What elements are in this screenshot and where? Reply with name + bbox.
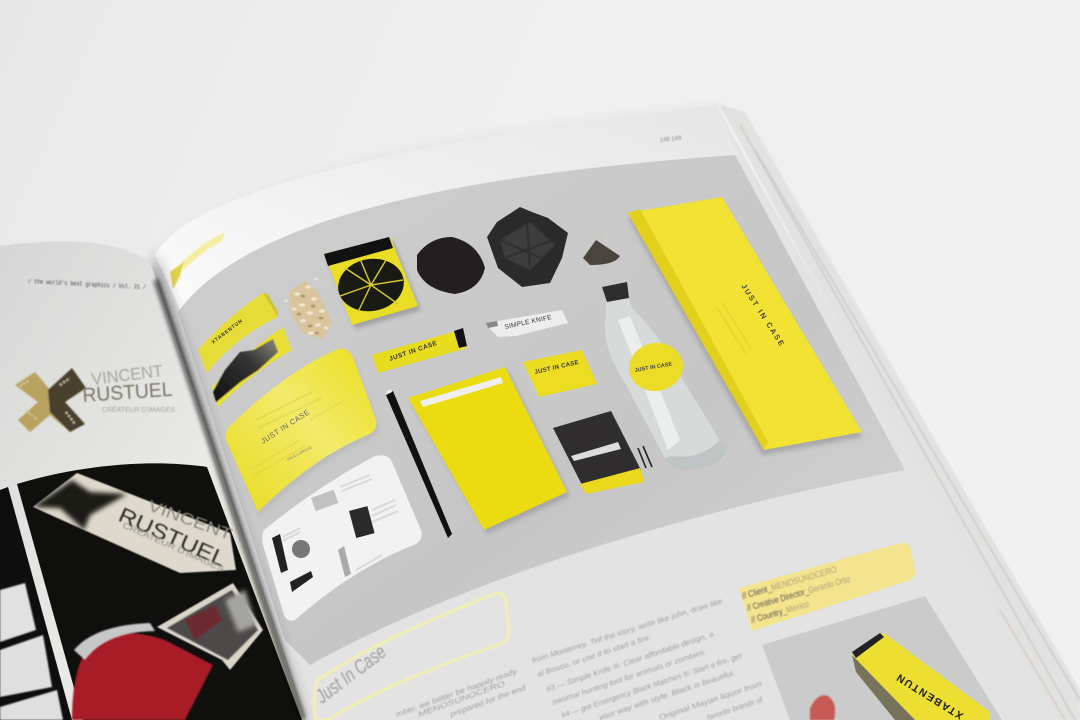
page number: 148 149 [660, 136, 682, 144]
yellow section tab [170, 232, 225, 289]
simple knife tag [486, 310, 568, 337]
credits box: // Country_Mexico [750, 599, 810, 625]
red knife small photo [810, 695, 835, 720]
yellow round-cornered card [226, 349, 378, 516]
credits box: // Client_MENOSUNOCERO [741, 564, 838, 601]
body copy [395, 596, 765, 720]
logo wordmark [82, 361, 175, 414]
credits box [739, 543, 915, 631]
left black strip with tiles [0, 487, 72, 720]
simple knife tag: SIMPLE KNIFE [504, 314, 553, 331]
body copy: #3 — Simple Knife ®: Clear affordable design, a [545, 630, 715, 694]
photo inset [157, 583, 263, 670]
grey photo panel [178, 155, 905, 665]
logo wordmark: CRÉATEUR D'IMAGES [102, 405, 175, 414]
business card: JUST IN CASE [534, 360, 579, 376]
yellow folder [408, 367, 570, 534]
brochure card [262, 455, 422, 621]
business card [523, 350, 597, 397]
main black photo: CRÉATEUR D'IMAGES [121, 521, 225, 574]
white header band [155, 105, 738, 310]
matches [638, 446, 652, 468]
yellow notebook with wheel [324, 237, 421, 329]
credits box: // Creative Director_Gerardo Ortiz [746, 574, 852, 613]
Just In Case heading box [311, 593, 509, 720]
black stones [417, 207, 620, 294]
black pen [386, 389, 452, 538]
just in case matchbook label [372, 328, 467, 373]
yellow round-cornered card: JUST IN CASE [259, 408, 311, 446]
xtabentun labels: XTABENTUN [211, 318, 244, 346]
right page [150, 105, 1058, 720]
body copy: from Monterrey. Tell the story, write like john, draw like [531, 596, 723, 665]
long yellow box [628, 197, 862, 455]
main black photo [17, 463, 302, 720]
glass bottle: JUST IN CASE [634, 361, 673, 374]
red object [72, 633, 213, 720]
logo wordmark: VINCENT [90, 361, 164, 389]
bottle silhouette [213, 339, 278, 402]
main black photo: RUSTUEL [115, 504, 229, 571]
left page [0, 241, 305, 720]
dark card [553, 411, 644, 494]
body copy: prepared for the end [447, 683, 528, 719]
gold flakes [284, 278, 332, 339]
main black photo: VINCENT [146, 498, 234, 544]
body copy: al Bosco, or use it to start a fire. [536, 632, 652, 679]
long yellow box: JUST IN CASE [739, 282, 786, 347]
glass bottle [602, 282, 727, 470]
photo white sign [33, 473, 236, 573]
logo X mark [15, 368, 86, 432]
body copy: #4 — got Emergency Black Matches ®: Start a fire, get [560, 651, 744, 720]
body copy: MENOSUNOCERO [417, 679, 506, 719]
yellow box small photo [852, 633, 990, 720]
xtabentun labels [198, 293, 292, 407]
gutter shadow [150, 255, 305, 720]
small photo panel [762, 596, 1002, 720]
heading text: Just In Case [311, 641, 390, 708]
body copy: minimal hunting tool for animals or zombies. [551, 647, 707, 707]
gutter dark line [156, 280, 303, 720]
page stack edge [720, 105, 1080, 720]
page shadow [150, 105, 735, 265]
running head: / the world's best graphics / Vol. 31 / [28, 278, 146, 291]
just in case matchbook label: JUST IN CASE [388, 340, 439, 363]
yellow round-cornered card: PAULA BRAVO [286, 445, 313, 462]
bottle label [625, 339, 687, 395]
body copy: mber, we better be happily ready [395, 666, 519, 719]
logo wordmark: RUSTUEL [82, 379, 173, 407]
